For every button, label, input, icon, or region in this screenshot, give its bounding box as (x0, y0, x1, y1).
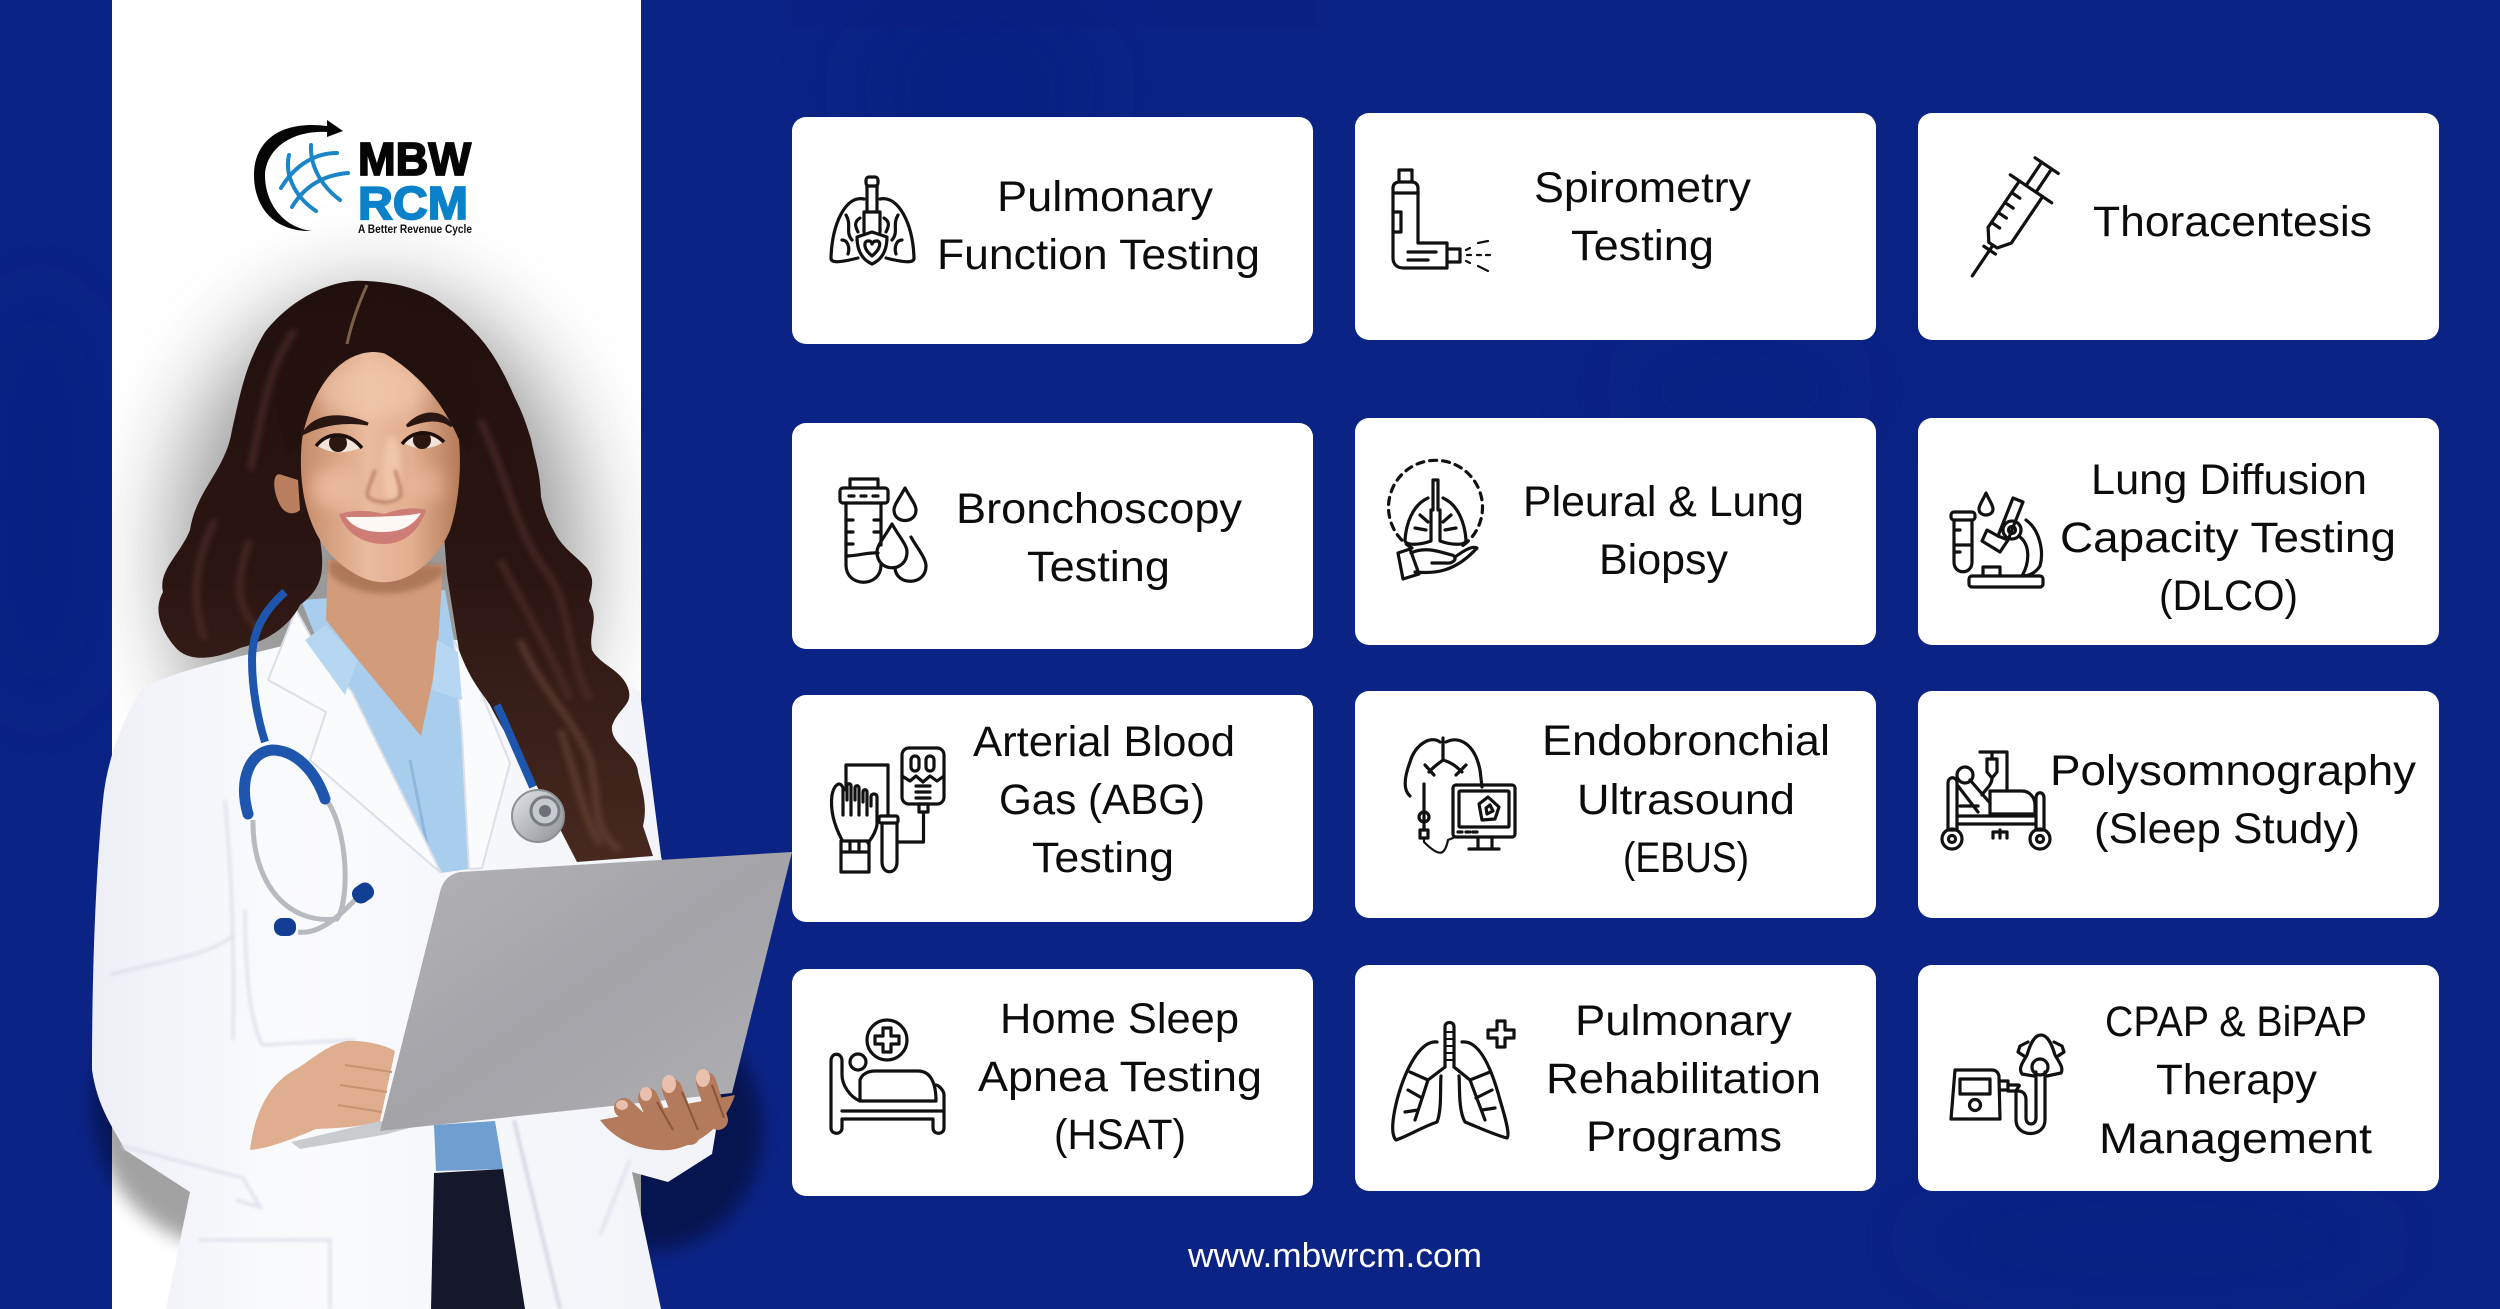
text (2050, 747, 2417, 853)
text: Home Sleep (1000, 995, 1239, 1043)
logo wordmark: RCM (358, 177, 468, 229)
coat lapels (268, 610, 441, 873)
portrait: doctor with laptop (92, 281, 792, 1309)
text: Pulmonary (997, 173, 1214, 221)
icon: syringe (1952, 152, 2067, 290)
text: Ultrasound (1577, 776, 1795, 824)
text: Apnea Testing (978, 1053, 1262, 1101)
text: (DLCO) (2159, 572, 2298, 620)
text: Programs (1586, 1113, 1782, 1161)
lab coat (92, 640, 719, 1309)
card: Home Sleep Apnea Testing (HSAT) (792, 969, 1313, 1196)
logo wordmark (358, 133, 472, 236)
icon: test tube and drops (840, 479, 926, 582)
text: Biopsy (1599, 536, 1728, 584)
card: Thoracentesis (1918, 113, 2439, 340)
text: Thoracentesis (2093, 198, 2372, 246)
icon: inhaler (1393, 170, 1490, 271)
text (2099, 998, 2372, 1163)
icon: CPAP machine and mask (1951, 1035, 2064, 1134)
text: Testing (1027, 543, 1170, 591)
text: Therapy (2156, 1056, 2318, 1104)
left hand (250, 1041, 395, 1150)
text: Gas (ABG) (999, 776, 1205, 824)
face (274, 285, 480, 582)
card: Pleural & Lung Biopsy (1355, 418, 1876, 645)
text (1546, 997, 1821, 1161)
text (973, 718, 1235, 882)
text (937, 173, 1260, 279)
card: Spirometry Testing (1355, 113, 1876, 340)
text: Spirometry (1534, 164, 1752, 212)
text (1534, 164, 1752, 270)
icon: hospital bed with patient (1942, 752, 2050, 849)
dark trousers (431, 1169, 525, 1309)
card: Arterial Blood Gas (ABG) Testing (792, 695, 1313, 922)
text (956, 485, 1243, 591)
card: Polysomnography (Sleep Study) (1918, 691, 2439, 918)
card: Pulmonary Rehabilitation Programs (1355, 965, 1876, 1191)
panel: white portrait band (112, 0, 641, 1309)
brows and eyes (304, 414, 452, 452)
text: Capacity Testing (2060, 514, 2396, 562)
text (2060, 456, 2396, 620)
text: Pleural & Lung (1523, 478, 1804, 526)
text: Testing (1032, 834, 1174, 882)
blue shirt (301, 590, 469, 873)
logo wordmark: A Better Revenue Cycle (358, 222, 472, 236)
text: Testing (1571, 222, 1714, 270)
card: Lung Diffusion Capacity Testing (DLCO) (1918, 418, 2439, 645)
text: Management (2099, 1115, 2372, 1163)
card: CPAP & BiPAP Therapy Management (1918, 965, 2439, 1191)
logo: MBW RCM (254, 120, 472, 236)
text: Polysomnography (2050, 747, 2417, 795)
panel: cards grid (792, 113, 2439, 1196)
text: Bronchoscopy (956, 485, 1243, 533)
text: Arterial Blood (973, 718, 1235, 766)
icon: lungs and ultrasound monitor (1405, 738, 1515, 853)
shadow behind portrait (93, 295, 762, 1250)
text: (EBUS) (1623, 834, 1749, 882)
text (1523, 478, 1804, 584)
card: Bronchoscopy Testing (792, 423, 1313, 649)
stethoscope (244, 592, 564, 936)
text: Pulmonary (1575, 997, 1793, 1045)
text: (Sleep Study) (2094, 805, 2360, 853)
icon: hand, IV bag and tube (831, 748, 944, 872)
text: CPAP & BiPAP (2105, 998, 2367, 1046)
icon: lungs with shield (831, 177, 914, 264)
icon: microscope and test tube (1951, 493, 2043, 587)
card: Endobronchial Ultrasound (EBUS) (1355, 691, 1876, 918)
card: Pulmonary Function Testing (792, 117, 1313, 344)
logo wordmark: MBW (358, 133, 472, 185)
icon: bed with medical cross (831, 1020, 944, 1133)
text: Rehabilitation (1546, 1055, 1821, 1103)
text: Function Testing (937, 231, 1260, 279)
text (1542, 717, 1830, 882)
hair (158, 281, 653, 862)
website url: www.mbwrcm.com (1187, 1237, 1482, 1275)
nose and smile (339, 470, 426, 544)
text (978, 995, 1262, 1159)
text: (HSAT) (1054, 1111, 1186, 1159)
text: Lung Diffusion (2091, 456, 2367, 504)
text: Endobronchial (1542, 717, 1830, 765)
icon: lungs in hand (1388, 460, 1482, 579)
front hair (275, 300, 480, 455)
icon: lungs with plus (1393, 1021, 1514, 1140)
icon: logo arrow and globe (254, 120, 348, 231)
laptop (291, 1120, 440, 1149)
right hand (600, 1069, 735, 1150)
